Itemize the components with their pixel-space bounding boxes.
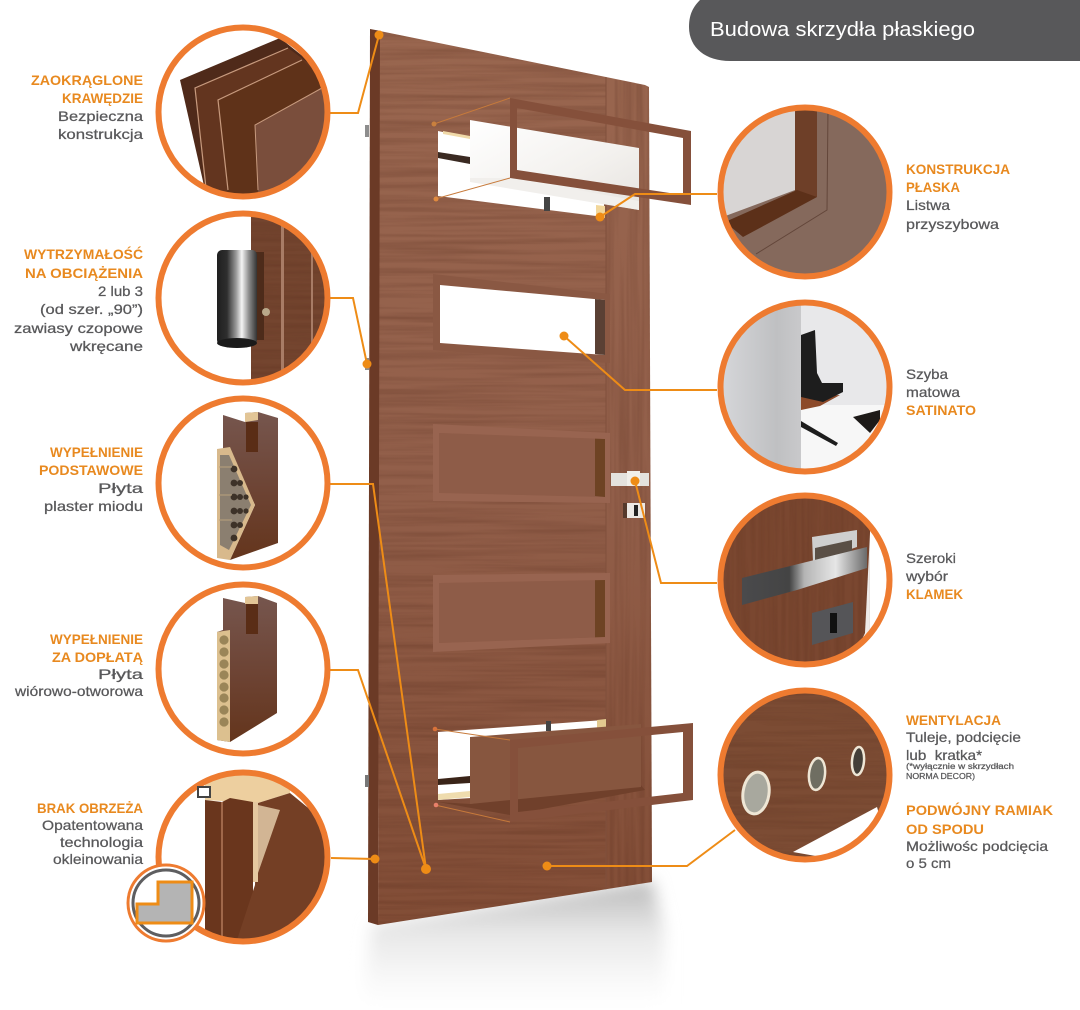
label: rounded edges xyxy=(31,72,143,142)
dark recess xyxy=(438,784,645,815)
label: ventilation: (*wyłącznie w skrzydłach xyxy=(906,762,1014,771)
label: basic filling: Płyta xyxy=(98,480,143,496)
tray xyxy=(470,178,639,210)
wood panel xyxy=(470,724,641,804)
door face xyxy=(378,31,652,925)
honeycomb cells xyxy=(231,466,249,541)
label: no edge band: Opatentowana xyxy=(42,817,143,833)
label: rounded edges: KRAWĘDZIE xyxy=(62,90,143,106)
header banner xyxy=(689,0,1080,61)
label: ventilation: Tuleje, podcięcie xyxy=(906,729,1021,745)
label: rounded edges: konstrukcja xyxy=(58,126,143,142)
label: flat construction: przyszybowa xyxy=(906,216,999,232)
label: no edge band: BRAK OBRZEŻA xyxy=(37,800,143,816)
detail circle: no edge band xyxy=(158,770,335,950)
vent sleeves xyxy=(740,770,772,816)
label: extra-cost filling: WYPEŁNIENIE xyxy=(50,631,143,647)
sash frame xyxy=(510,723,693,822)
label: load capacity: 2 lub 3 xyxy=(98,283,143,299)
label: load capacity xyxy=(14,245,143,354)
window 3 panel xyxy=(433,424,610,503)
label: load capacity: NA OBCIĄŻENIA xyxy=(25,265,143,281)
detail circle: rounded edges xyxy=(158,28,345,205)
label: no edge band: technologia xyxy=(60,834,143,850)
door edge xyxy=(368,29,381,925)
opening xyxy=(438,131,604,217)
window 1 exploded xyxy=(432,98,691,218)
connector lines xyxy=(435,729,510,822)
callout lines xyxy=(330,30,735,874)
connector lines xyxy=(434,98,510,199)
detail circle: ventilation xyxy=(720,690,895,870)
label: basic filling: PODSTAWOWE xyxy=(39,462,143,478)
detail circle: tubular chipboard filling xyxy=(158,584,328,754)
label: double bottom rail xyxy=(906,801,1053,871)
label: extra-cost filling: wiórowo-otworowa xyxy=(14,683,143,699)
door wood grain xyxy=(378,28,653,928)
label: extra-cost filling: Płyta xyxy=(98,666,143,682)
label: basic filling xyxy=(39,444,143,514)
label: frosted glass: matowa xyxy=(906,384,960,400)
window 2 glass xyxy=(433,274,610,363)
label: no edge band: okleinowania xyxy=(53,851,143,867)
detail circle: honeycomb filling xyxy=(158,398,328,568)
hinge tab xyxy=(198,787,210,797)
window 4 panel xyxy=(433,573,610,652)
label: frosted glass: SATINATO xyxy=(906,402,976,418)
label: flat construction: KONSTRUKCJA xyxy=(906,161,1010,177)
label: frosted glass: Szyba xyxy=(906,366,948,382)
glass pane xyxy=(470,120,639,210)
label: handles: KLAMEK xyxy=(906,586,963,602)
header banner: Budowa skrzydła płaskiego xyxy=(710,19,975,41)
label: load capacity: zawiasy czopowe xyxy=(14,320,143,336)
detail circle: hinge xyxy=(158,210,341,390)
detail circle: door handle xyxy=(720,495,890,665)
hinges xyxy=(365,125,369,787)
label: basic filling: plaster miodu xyxy=(44,498,143,514)
label: flat construction xyxy=(906,161,1010,232)
label: no edge band xyxy=(37,800,143,867)
detail circle: frosted glass xyxy=(720,300,891,475)
inset: edge profile xyxy=(128,865,204,941)
label: handles: wybór xyxy=(905,568,948,584)
label: flat construction: PŁASKA xyxy=(906,179,960,195)
detail circle: flat construction xyxy=(720,105,890,280)
label: ventilation: NORMA DECOR) xyxy=(906,772,975,781)
label: load capacity: (od szer. „90”) xyxy=(40,301,143,317)
label: handles xyxy=(905,550,963,602)
label: double bottom rail: PODWÓJNY RAMIAK xyxy=(906,801,1053,818)
opening xyxy=(438,720,604,800)
label: load capacity: WYTRZYMAŁOŚĆ xyxy=(24,245,143,262)
label: rounded edges: ZAOKRĄGLONE xyxy=(31,72,143,88)
door handle xyxy=(611,471,649,518)
label: ventilation: WENTYLACJA xyxy=(906,712,1001,728)
label: double bottom rail: Możliwośc podcięcia xyxy=(906,838,1048,854)
sash frame xyxy=(510,98,691,205)
label: frosted glass xyxy=(906,366,976,418)
label: load capacity: wkręcane xyxy=(69,338,143,354)
label: extra-cost filling: ZA DOPŁATĄ xyxy=(52,649,143,665)
label: rounded edges: Bezpieczna xyxy=(58,108,143,124)
label: double bottom rail: o 5 cm xyxy=(906,855,951,871)
label: flat construction: Listwa xyxy=(906,197,950,213)
label: ventilation: lub kratka* xyxy=(906,747,983,763)
label: basic filling: WYPEŁNIENIE xyxy=(50,444,143,460)
label: handles: Szeroki xyxy=(906,550,956,566)
tube holes xyxy=(219,635,229,727)
label: double bottom rail: OD SPODU xyxy=(906,821,984,837)
label: extra-cost filling xyxy=(14,631,143,699)
door floor shadow xyxy=(362,880,664,1010)
label: ventilation xyxy=(906,712,1021,781)
window 5 exploded xyxy=(433,719,693,822)
door xyxy=(365,28,693,928)
